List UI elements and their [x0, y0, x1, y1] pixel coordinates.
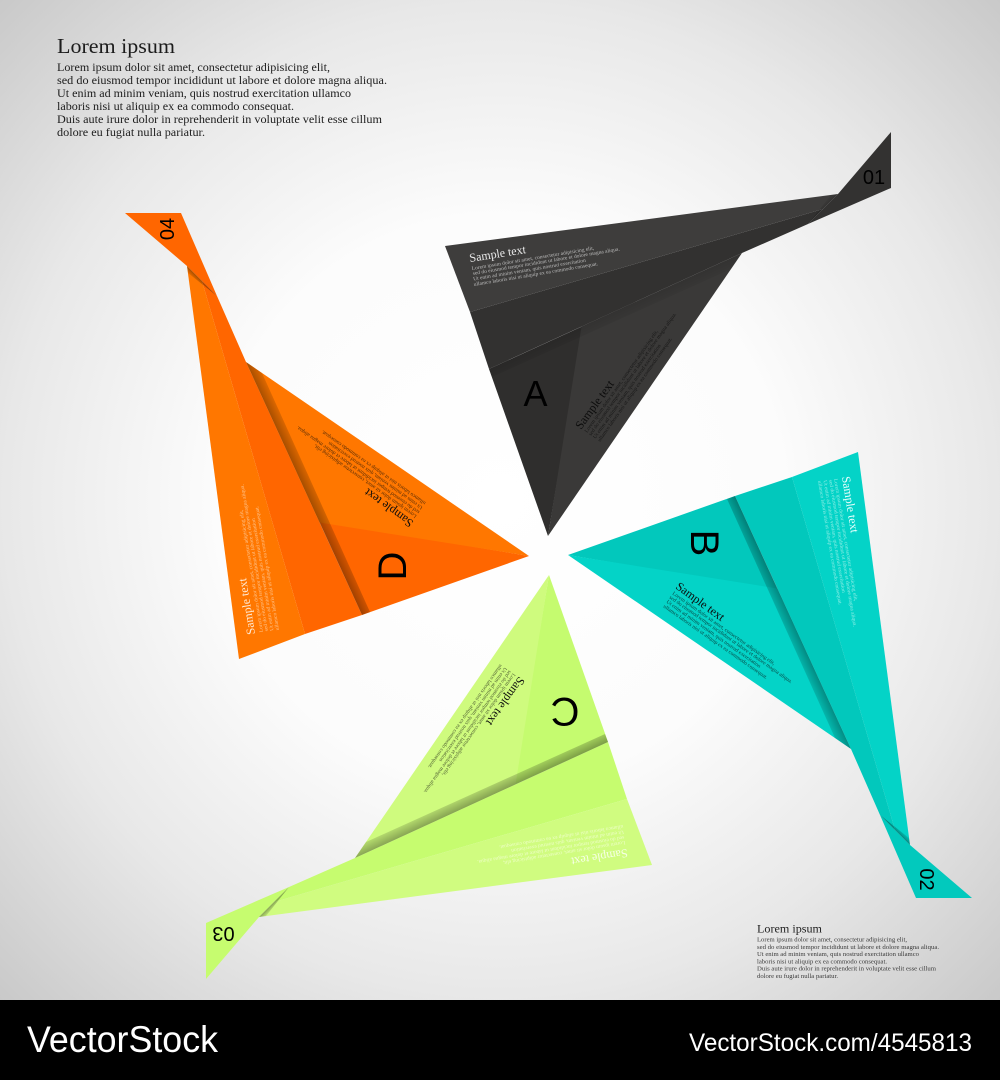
image url: VectorStock.com/4545813: [689, 1029, 972, 1057]
intro text: Duis aute irure dolor in reprehenderit in voluptate velit esse cillum: [57, 114, 382, 126]
intro text: sed do eiusmod tempor incididunt ut labore et dolore magna aliqua.: [57, 75, 387, 87]
tail 03: [206, 887, 289, 979]
light sample text: [235, 484, 281, 636]
heading: Lorem ipsum: [57, 34, 175, 58]
number 02: 02: [915, 868, 937, 891]
light sample text: Sample text: [468, 242, 527, 265]
segment D: [320, 522, 529, 615]
note text: Duis aute irure dolor in reprehenderit in voluptate velit esse cillum: [757, 966, 937, 973]
dark sample text: Lorem ipsum dolor sit amet, consectetur adipisicing elit,: [584, 329, 660, 434]
light sample text: Sample text: [839, 475, 862, 534]
fold shadow: [355, 734, 608, 858]
middle band: [735, 477, 895, 830]
dark sample text: sed do eiusmod tempor incididunt ut labore et dolore magna aliqua.: [588, 312, 678, 437]
watermark banner: [0, 1000, 1000, 1080]
upper flap: [187, 266, 305, 659]
dark sample text: Lorem ipsum dolor sit amet, consectetur adipisicing elit,: [440, 672, 516, 777]
light sample text: Lorem ipsum dolor sit amet, consectetur adipisicing elit,: [832, 478, 858, 602]
segment C: [515, 575, 608, 784]
fold shadow: [246, 362, 370, 615]
dark sample text: Ut enim ad minim veniam, quis nostrud exercitation: [327, 440, 424, 510]
light sample text: sed do eiusmod tempor incididunt ut labore et dolore magna aliqua.: [239, 484, 270, 632]
tail 01: [808, 132, 891, 224]
letter D: D: [371, 552, 415, 580]
light sample text: Ut enim ad minim veniam, quis nostrud exercitation: [510, 829, 624, 853]
light sample text: Ut enim ad minim veniam, quis nostrud exercitation: [473, 258, 587, 282]
dark sample text: Ut enim ad minim veniam, quis nostrud exercitation: [437, 666, 508, 763]
note text: Lorem ipsum dolor sit amet, consectetur adipisicing elit,: [757, 936, 907, 944]
note heading: Lorem ipsum: [757, 924, 822, 936]
dark sample text: ullamco laboris nisi ut aliquip ex ea commodo consequat.: [426, 663, 503, 770]
fold shadow: [489, 253, 742, 377]
tail crease: [259, 887, 289, 917]
note text: Ut enim ad minim veniam, quis nostrud exercitation ullamco: [757, 951, 920, 958]
right panel: [355, 575, 549, 858]
light sample text: Lorem ipsum dolor sit amet, consectetur adipisicing elit,: [471, 246, 595, 272]
upper flap: [259, 799, 652, 917]
brand name: VectorStock: [27, 1019, 218, 1060]
panel B cyan: [568, 452, 972, 898]
light sample text: Lorem ipsum dolor sit amet, consectetur adipisicing elit,: [502, 839, 626, 865]
upper flap: [445, 194, 838, 312]
segment A: [489, 326, 582, 536]
dark sample text: sed do eiusmod tempor incididunt ut labore et dolore magna aliqua.: [422, 669, 512, 794]
note text: sed do eiusmod tempor incididunt ut labore et dolore magna aliqua.: [757, 944, 939, 951]
dark sample text: Sample text: [673, 579, 728, 624]
intro text: laboris nisi ut aliquip ex ea commodo consequat.: [57, 101, 294, 113]
tail 02: [880, 815, 972, 898]
dark sample text: sed do eiusmod tempor incididunt ut labore et dolore magna aliqua.: [296, 424, 421, 515]
light sample text: Lorem ipsum dolor sit amet, consectetur adipisicing elit,: [239, 509, 265, 633]
dark sample text: Lorem ipsum dolor sit amet, consectetur adipisicing elit,: [313, 443, 418, 519]
right panel: [568, 555, 851, 749]
light sample text: Ut enim ad minim veniam, quis nostrud exercitation: [251, 517, 275, 631]
tail crease: [187, 266, 217, 296]
tail crease: [808, 194, 838, 224]
light sample text: Sample text: [570, 846, 629, 869]
heading block top left: [57, 34, 387, 139]
note block bottom right: [757, 924, 939, 980]
dark sample text: Ut enim ad minim veniam, quis nostrud exercitation: [665, 599, 762, 670]
intro text: Lorem ipsum dolor sit amet, consectetur adipisicing elit,: [57, 62, 330, 74]
light sample text: sed do eiusmod tempor incididunt ut labore et dolore magna aliqua.: [472, 246, 620, 277]
light sample text: sed do eiusmod tempor incididunt ut labore et dolore magna aliqua.: [827, 479, 858, 627]
letter A: A: [523, 373, 548, 414]
dark sample text: ullamco laboris nisi ut aliquip ex ea commodo consequat.: [662, 604, 769, 681]
tail 04: [125, 213, 217, 296]
tail crease: [880, 815, 910, 845]
letter B: B: [682, 530, 726, 556]
number 01: 01: [863, 167, 885, 189]
panel A dark: [445, 132, 891, 536]
dark sample text: Lorem ipsum dolor sit amet, consectetur adipisicing elit,: [671, 591, 776, 667]
note text: [757, 936, 939, 980]
light sample text: [477, 823, 629, 869]
note text: dolore eu fugiat nulla pariatur.: [757, 973, 838, 980]
light sample text: Sample text: [235, 577, 258, 636]
number 03: 03: [212, 922, 235, 944]
right panel: [246, 362, 529, 556]
note text: laboris nisi ut aliquip ex ea commodo consequat.: [757, 958, 887, 965]
light sample text: ullamco laboris nisi ut aliquip ex ea commodo consequat.: [816, 480, 843, 606]
right panel: [548, 253, 742, 536]
light sample text: ullamco laboris nisi ut aliquip ex ea commodo consequat.: [498, 823, 624, 850]
dark sample text: Sample text: [361, 485, 416, 530]
panel D orange: [125, 213, 529, 659]
light sample text: [468, 242, 620, 288]
dark sample text: ullamco laboris nisi ut aliquip ex ea commodo consequat.: [320, 429, 427, 506]
middle band: [470, 209, 823, 369]
light sample text: [816, 475, 862, 627]
dark sample text: Sample text: [483, 674, 528, 729]
letter C: C: [551, 689, 579, 733]
dark sample text: Ut enim ad minim veniam, quis nostrud exercitation: [592, 343, 663, 440]
fold shadow: [727, 496, 851, 749]
dark sample text: ullamco laboris nisi ut aliquip ex ea commodo consequat.: [597, 336, 674, 443]
upper flap: [792, 452, 910, 845]
dark sample text: Sample text: [572, 377, 617, 432]
number 04: 04: [157, 218, 179, 240]
middle band: [274, 742, 627, 902]
intro text: Ut enim ad minim veniam, quis nostrud exercitation ullamco: [57, 88, 351, 100]
light sample text: ullamco laboris nisi ut aliquip ex ea commodo consequat.: [254, 505, 281, 631]
panel C green: [206, 575, 652, 979]
light sample text: sed do eiusmod tempor incididunt ut labore et dolore magna aliqua.: [477, 834, 625, 865]
light sample text: Ut enim ad minim veniam, quis nostrud exercitation: [822, 480, 846, 594]
intro text: [57, 62, 387, 139]
intro text: dolore eu fugiat nulla pariatur.: [57, 127, 205, 139]
segment B: [568, 496, 778, 589]
light sample text: ullamco laboris nisi ut aliquip ex ea commodo consequat.: [473, 261, 599, 288]
middle band: [202, 281, 362, 634]
dark sample text: sed do eiusmod tempor incididunt ut labore et dolore magna aliqua.: [668, 595, 793, 685]
